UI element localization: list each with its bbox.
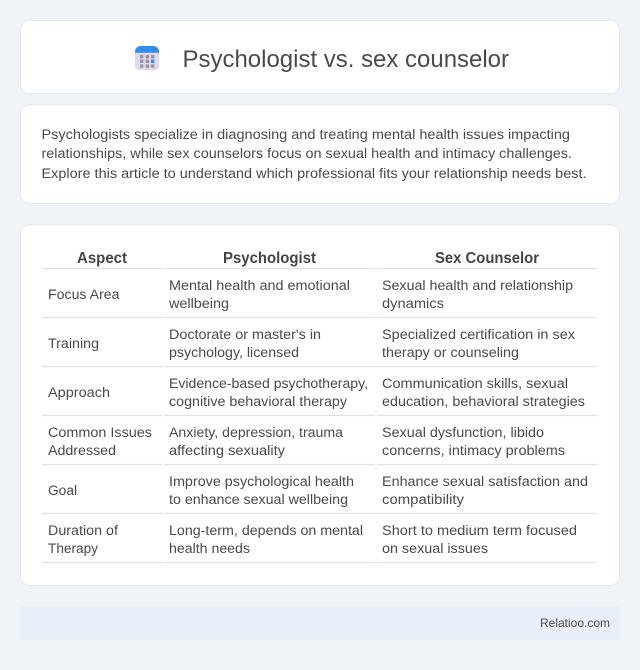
row: duration of therapy: on sexual issues [382,541,488,557]
row: focus area: Sexual health and relationship [382,278,573,294]
row: common issues addressed: Sexual dysfunction, libido [382,425,544,441]
row: common issues addressed: Anxiety, depression, trauma [169,425,343,441]
footer text: Relatioo.com [540,616,610,630]
row: goal [48,474,588,508]
row: focus area: dynamics [382,296,444,312]
row: duration of therapy: Therapy [48,541,99,557]
row: training: Doctorate or master's in [169,327,321,343]
row: approach: Evidence-based psychotherapy, [169,376,368,392]
row: common issues addressed [48,425,565,459]
row: goal: Enhance sexual satisfaction and [382,474,588,490]
comparison table [42,250,597,562]
table rules [42,268,597,562]
row: training [48,327,575,361]
table header: Sex Counselor [435,250,539,267]
row: common issues addressed: concerns, intimacy problems [382,443,565,459]
panel: table card [20,224,620,586]
row: approach: Approach [48,385,110,401]
intro text: Psychologists specialize in diagnosing and treating mental health issues impacting [42,127,570,143]
row: focus area: Focus Area [48,287,120,303]
row: training: psychology, licensed [169,345,299,361]
title: Psychologist vs. sex counselor [182,46,509,73]
row: approach [48,376,585,410]
row: duration of therapy: health needs [169,541,250,557]
intro text: Explore this article to understand which professional fits your relationship needs best. [42,166,586,182]
row: focus area [48,278,573,312]
row: training: Training [48,336,99,352]
row: goal: to enhance sexual wellbeing [169,492,348,508]
icon: calendar [135,46,159,70]
row: training: Specialized certification in sex [382,327,575,343]
intro text: relationships, while sex counselors focus on sexual health and intimacy challenges. [42,146,572,162]
row: goal: compatibility [382,492,465,508]
row: goal: Goal [48,483,77,499]
table header: Psychologist [223,250,316,267]
panel: intro card [20,104,620,204]
row: duration of therapy: Short to medium term focused [382,523,577,539]
row: approach: cognitive behavioral therapy [169,394,348,410]
row: focus area: Mental health and emotional [169,278,350,294]
row: training: therapy or counseling [382,345,519,361]
row: common issues addressed: affecting sexuality [169,443,286,459]
panel: title card [20,20,620,94]
row: duration of therapy: Duration of [48,523,118,539]
row: common issues addressed: Addressed [48,443,116,459]
row: duration of therapy [48,523,577,557]
intro text [42,127,586,182]
row: focus area: wellbeing [168,296,229,312]
table header: Aspect [77,250,127,267]
row: duration of therapy: Long-term, depends on mental [169,523,363,539]
table header [77,250,539,267]
row: approach: education, behavioral strategies [382,394,585,410]
row: approach: Communication skills, sexual [382,376,568,392]
footer bar [20,606,620,640]
row: goal: Improve psychological health [169,474,354,490]
row: common issues addressed: Common Issues [48,425,152,441]
